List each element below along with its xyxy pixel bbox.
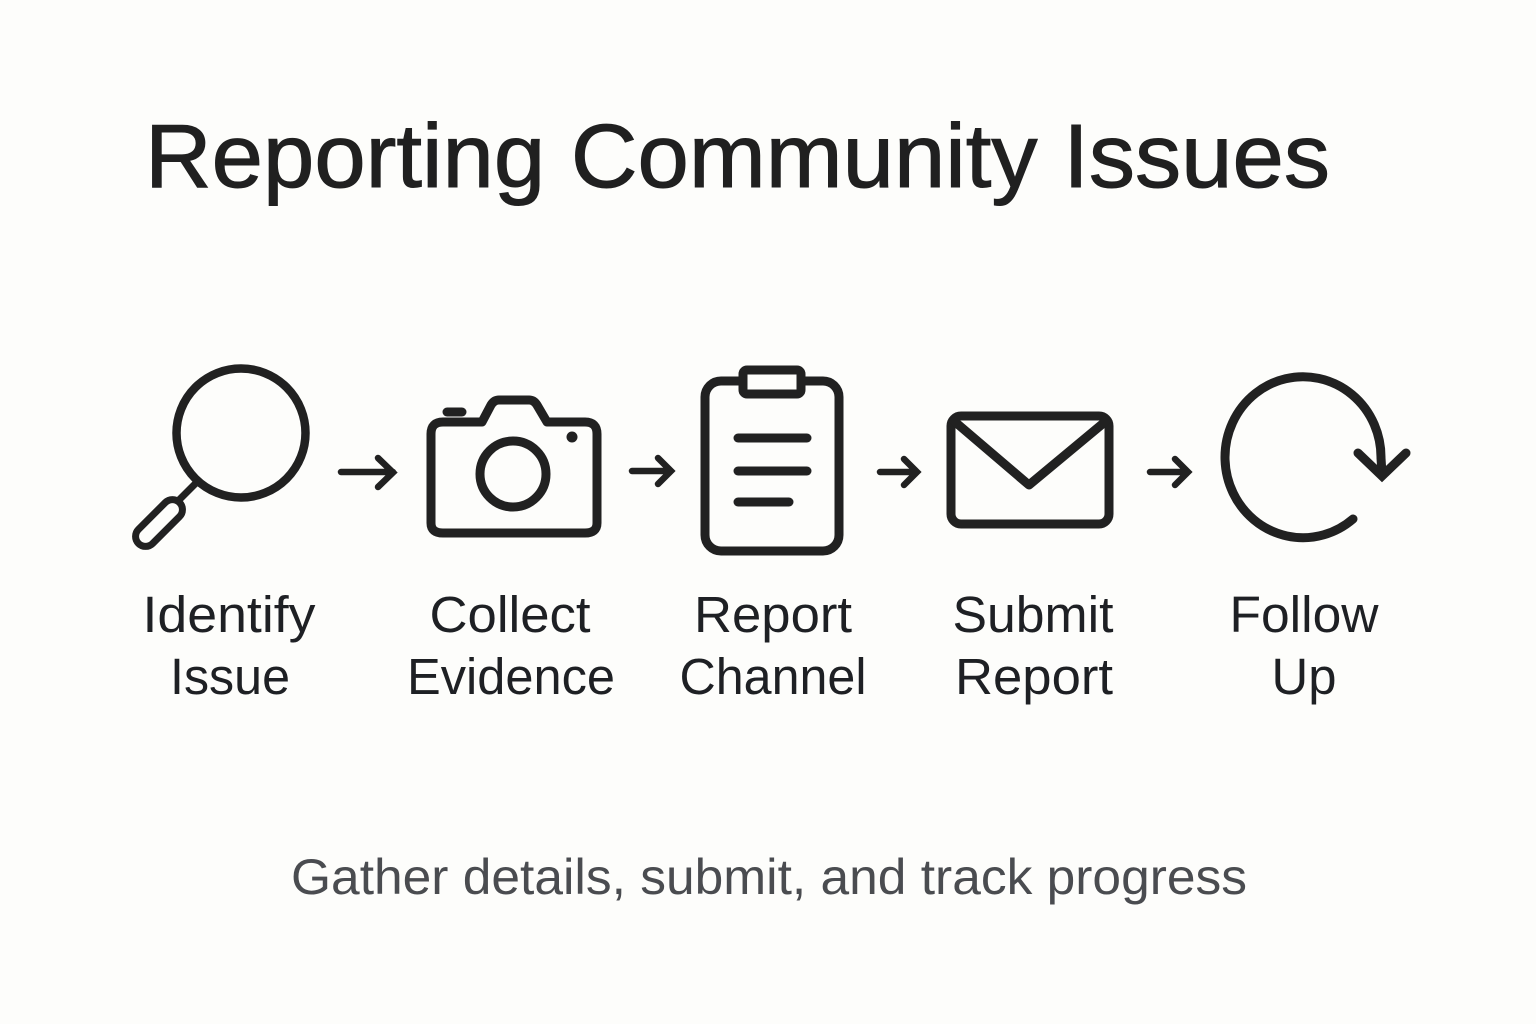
label: Submit Report: Submit xyxy=(952,586,1114,643)
subtitle: Gather details, submit, and track progress xyxy=(291,849,1247,905)
label: Collect Evidence xyxy=(407,586,615,705)
title: Reporting Community Issues xyxy=(145,107,1330,207)
label: Identify Issue xyxy=(142,586,316,705)
label: Follow Up: Follow xyxy=(1230,586,1379,643)
label: Report Channel: Report xyxy=(694,586,852,643)
label: Follow Up xyxy=(1230,586,1379,705)
label: Follow Up: Up xyxy=(1272,648,1336,705)
arrow 4 xyxy=(1150,459,1188,485)
icon: follow-up circular arrow xyxy=(1225,377,1406,538)
arrow 2 xyxy=(632,458,671,484)
icon: camera xyxy=(431,400,597,533)
label: Report Channel: Channel xyxy=(680,648,866,705)
icon: magnifying glass xyxy=(131,368,306,551)
arrow 3 xyxy=(880,459,917,485)
label: Report Channel xyxy=(680,586,866,705)
label: Collect Evidence: Collect xyxy=(430,586,590,643)
icon: envelope xyxy=(951,416,1109,524)
label: Identify Issue: Identify xyxy=(142,586,316,643)
label: Collect Evidence: Evidence xyxy=(407,648,615,705)
label: Identify Issue: Issue xyxy=(170,648,290,705)
arrow 1 xyxy=(341,458,393,487)
label: Submit Report xyxy=(952,586,1114,705)
icon: clipboard xyxy=(705,370,839,551)
label: Submit Report: Report xyxy=(955,648,1113,705)
